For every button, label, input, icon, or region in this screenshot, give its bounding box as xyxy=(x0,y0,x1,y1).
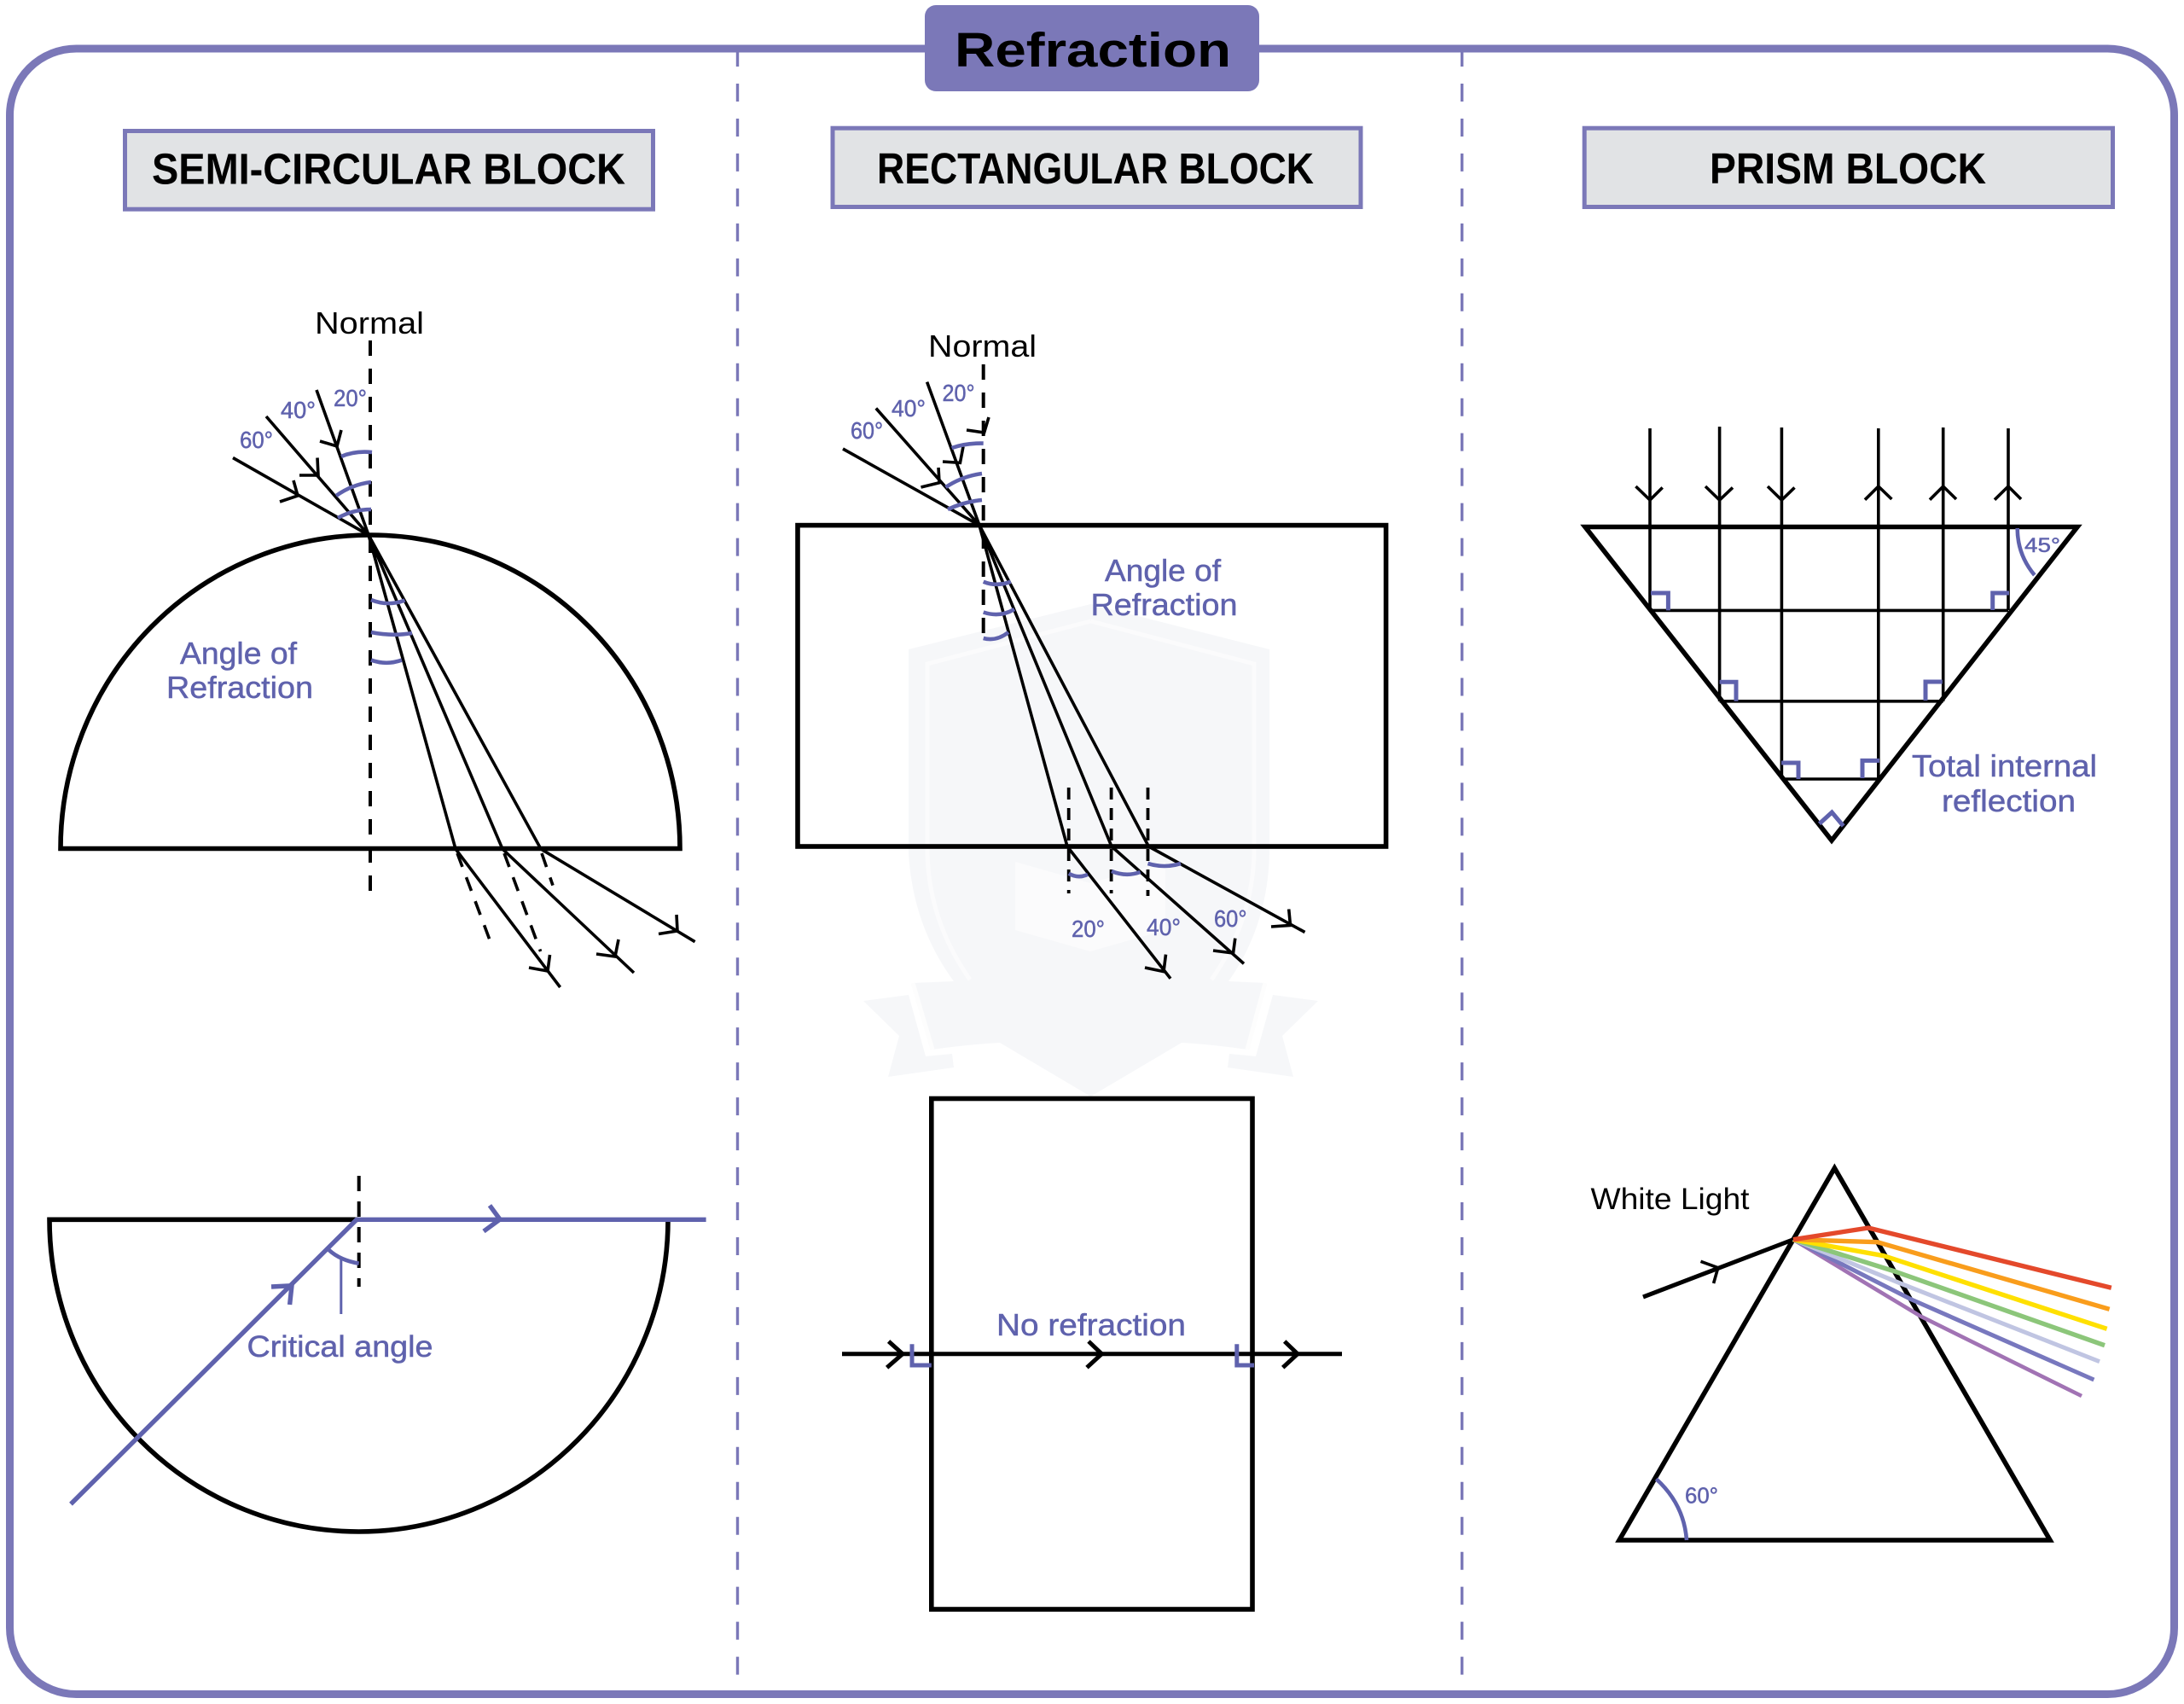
normal dashed xyxy=(357,1176,361,1287)
ray arrowheads xyxy=(271,1206,500,1305)
incident angle labels xyxy=(240,385,367,453)
incident white ray xyxy=(1643,1240,1793,1297)
incident angle labels: 40° xyxy=(892,395,926,422)
incident angle labels xyxy=(851,380,974,444)
reflected horizontal rays xyxy=(1650,610,2008,779)
ray arrowheads xyxy=(887,1341,1298,1368)
watermark: shield crest xyxy=(863,604,1318,1096)
panel: no refraction diagram xyxy=(842,1099,1342,1609)
straight ray xyxy=(842,1352,1342,1356)
exit arrowheads xyxy=(1145,910,1290,972)
incident arrowhead xyxy=(1701,1261,1718,1283)
semi-circular block outline xyxy=(61,535,680,848)
heading: prism block xyxy=(1584,128,2112,206)
panel: rectangular refraction diagram xyxy=(798,329,1386,979)
refracted rays xyxy=(369,535,695,987)
critical angle pointer xyxy=(340,1259,342,1314)
total internal reflection label: Total internal xyxy=(1912,748,2097,783)
exit angle arcs xyxy=(1069,864,1181,876)
incident angle arcs xyxy=(945,444,984,509)
right angle marks xyxy=(912,1344,1254,1365)
normal line xyxy=(369,340,372,892)
column divider: left xyxy=(736,49,739,1676)
right angle marks xyxy=(1651,593,2009,826)
heading: semi-circular block xyxy=(125,131,653,209)
critical angle label: Critical angle xyxy=(247,1330,433,1364)
white light label: White Light xyxy=(1590,1183,1750,1216)
60 degree label: 60° xyxy=(1685,1483,1718,1509)
angle of refraction label xyxy=(166,636,313,705)
dashed extensions xyxy=(457,853,553,951)
title: Refraction xyxy=(955,23,1231,78)
semi-circular block, flat side up xyxy=(49,1219,668,1532)
total internal reflection label xyxy=(1912,748,2097,818)
exit angle labels: 20° xyxy=(1072,916,1105,942)
exit angle labels: 60° xyxy=(1214,905,1247,932)
incident arrowheads xyxy=(280,430,341,502)
no refraction label: No refraction xyxy=(996,1307,1186,1342)
heading: prism block: PRISM BLOCK xyxy=(1710,144,1986,193)
vertical rays xyxy=(1650,427,2008,779)
incident angle labels: 20° xyxy=(334,385,367,411)
title xyxy=(925,5,1259,91)
triangular prism outline xyxy=(1619,1168,2050,1540)
angle of refraction label xyxy=(1090,553,1237,622)
incident angle labels: 20° xyxy=(942,380,974,406)
incident rays xyxy=(233,390,369,535)
refraction angle arcs xyxy=(371,600,412,663)
incident angle labels: 60° xyxy=(851,417,883,444)
tall rectangular block xyxy=(932,1099,1252,1609)
critical ray xyxy=(71,1219,706,1504)
normal line xyxy=(982,364,985,640)
upward arrowheads xyxy=(1865,486,2021,500)
downward arrowheads xyxy=(1635,486,1795,500)
exit arrowheads xyxy=(529,915,677,971)
45 degree arc xyxy=(2018,528,2035,575)
refracted rays xyxy=(979,526,1305,979)
incident angle labels: 40° xyxy=(281,397,316,423)
angle of refraction label: Refraction xyxy=(166,670,313,705)
exit angle labels: 40° xyxy=(1147,914,1181,940)
refraction angle arcs xyxy=(984,582,1014,639)
incident rays xyxy=(843,382,979,526)
rectangular block outline xyxy=(798,526,1386,846)
panel: white light dispersion prism xyxy=(1590,1168,2111,1540)
spectrum rays xyxy=(1793,1228,2111,1396)
column divider: right xyxy=(1461,49,1463,1676)
inverted prism outline xyxy=(1585,527,2077,840)
60 degree arc xyxy=(1656,1479,1687,1540)
total internal reflection label: reflection xyxy=(1942,783,2076,818)
angle of refraction label: Refraction xyxy=(1090,587,1237,622)
exit angle labels xyxy=(1072,905,1247,942)
panel: semi-circular refraction diagram xyxy=(61,305,695,987)
incident angle arcs xyxy=(336,452,372,518)
heading: rectangular block xyxy=(833,128,1361,206)
heading: rectangular block: RECTANGULAR BLOCK xyxy=(877,144,1314,193)
incident angle labels: 60° xyxy=(240,427,273,453)
heading: semi-circular block: SEMI-CIRCULAR BLOCK xyxy=(152,145,625,193)
exit normals xyxy=(1069,788,1148,896)
incident arrowheads xyxy=(921,417,989,487)
angle of refraction label: Angle of xyxy=(1105,553,1222,588)
normal label: Normal xyxy=(315,305,424,340)
critical angle arc xyxy=(329,1250,359,1264)
angle of refraction label: Angle of xyxy=(180,636,298,671)
panel: critical angle diagram xyxy=(49,1176,706,1532)
normal label: Normal xyxy=(928,329,1037,363)
45 degree label: 45° xyxy=(2024,534,2060,557)
panel: total internal reflection prism xyxy=(1585,427,2097,840)
